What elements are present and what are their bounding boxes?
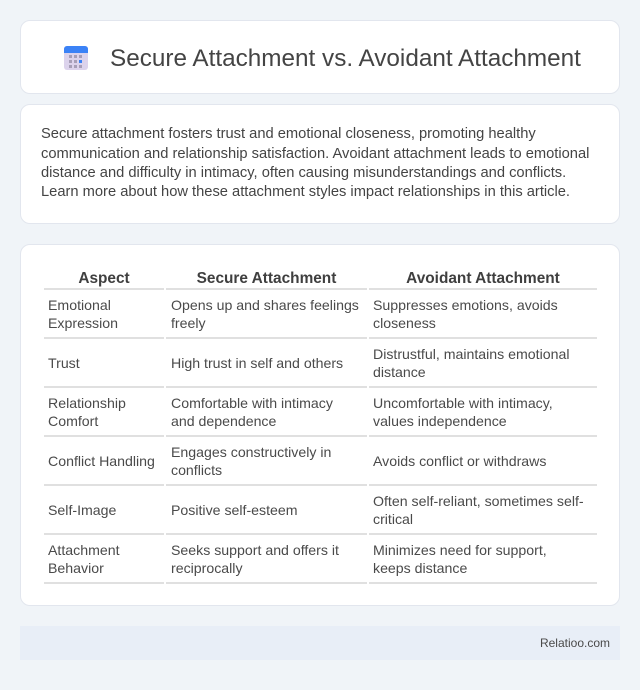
- comparison table: Aspect: [78, 270, 130, 287]
- comparison table: [44, 270, 597, 584]
- title card: [20, 20, 620, 94]
- icon: calendar: [64, 46, 88, 70]
- comparison table: Often self-reliant, sometimes self-: [373, 493, 584, 509]
- footer text: Relatioo.com: [540, 636, 610, 650]
- comparison table: Expression: [48, 315, 118, 331]
- comparison table: Seeks support and offers it: [171, 542, 339, 558]
- comparison table: Suppresses emotions, avoids: [373, 297, 558, 313]
- comparison table: Distrustful, maintains emotional: [373, 346, 569, 362]
- comparison table: Emotional: [48, 297, 111, 313]
- comparison table: Relationship: [48, 395, 126, 411]
- footer bar: [20, 626, 620, 660]
- intro text: communication and relationship satisfaction. Avoidant attachment leads to emotional: [41, 146, 589, 162]
- comparison table: Avoids conflict or withdraws: [373, 453, 546, 469]
- comparison table: Minimizes need for support,: [373, 542, 547, 558]
- comparison table: Opens up and shares feelings: [171, 297, 359, 313]
- comparison table: Behavior: [48, 560, 104, 576]
- intro text: [41, 126, 589, 200]
- comparison table: reciprocally: [171, 560, 243, 576]
- comparison table: distance: [373, 364, 426, 380]
- panel: comparison table: [20, 244, 620, 606]
- comparison table: Self-Image: [48, 502, 116, 518]
- comparison table: and dependence: [171, 413, 276, 429]
- comparison table: Trust: [48, 355, 80, 371]
- comparison table: Positive self-esteem: [171, 502, 298, 518]
- comparison table: Engages constructively in: [171, 444, 331, 460]
- title: Secure Attachment vs. Avoidant Attachment: [110, 45, 581, 72]
- comparison table: critical: [373, 511, 413, 527]
- comparison table: conflicts: [171, 462, 222, 478]
- comparison table: High trust in self and others: [171, 355, 343, 371]
- comparison table: Attachment: [48, 542, 120, 558]
- comparison table: Uncomfortable with intimacy,: [373, 395, 553, 411]
- intro text: distance and difficulty in intimacy, often causing misunderstandings and conflicts.: [41, 165, 566, 181]
- comparison table: freely: [171, 315, 206, 331]
- comparison table: Avoidant Attachment: [406, 270, 560, 287]
- intro text: Learn more about how these attachment styles impact relationships in this article.: [41, 184, 570, 200]
- comparison table: Secure Attachment: [197, 270, 336, 287]
- comparison table: values independence: [373, 413, 507, 429]
- panel: intro: [20, 104, 620, 224]
- intro text: Secure attachment fosters trust and emotional closeness, promoting healthy: [41, 126, 536, 142]
- comparison table: closeness: [373, 315, 436, 331]
- comparison table: Conflict Handling: [48, 453, 155, 469]
- comparison table: keeps distance: [373, 560, 467, 576]
- comparison table: Comfortable with intimacy: [171, 395, 333, 411]
- comparison table: Comfort: [48, 413, 98, 429]
